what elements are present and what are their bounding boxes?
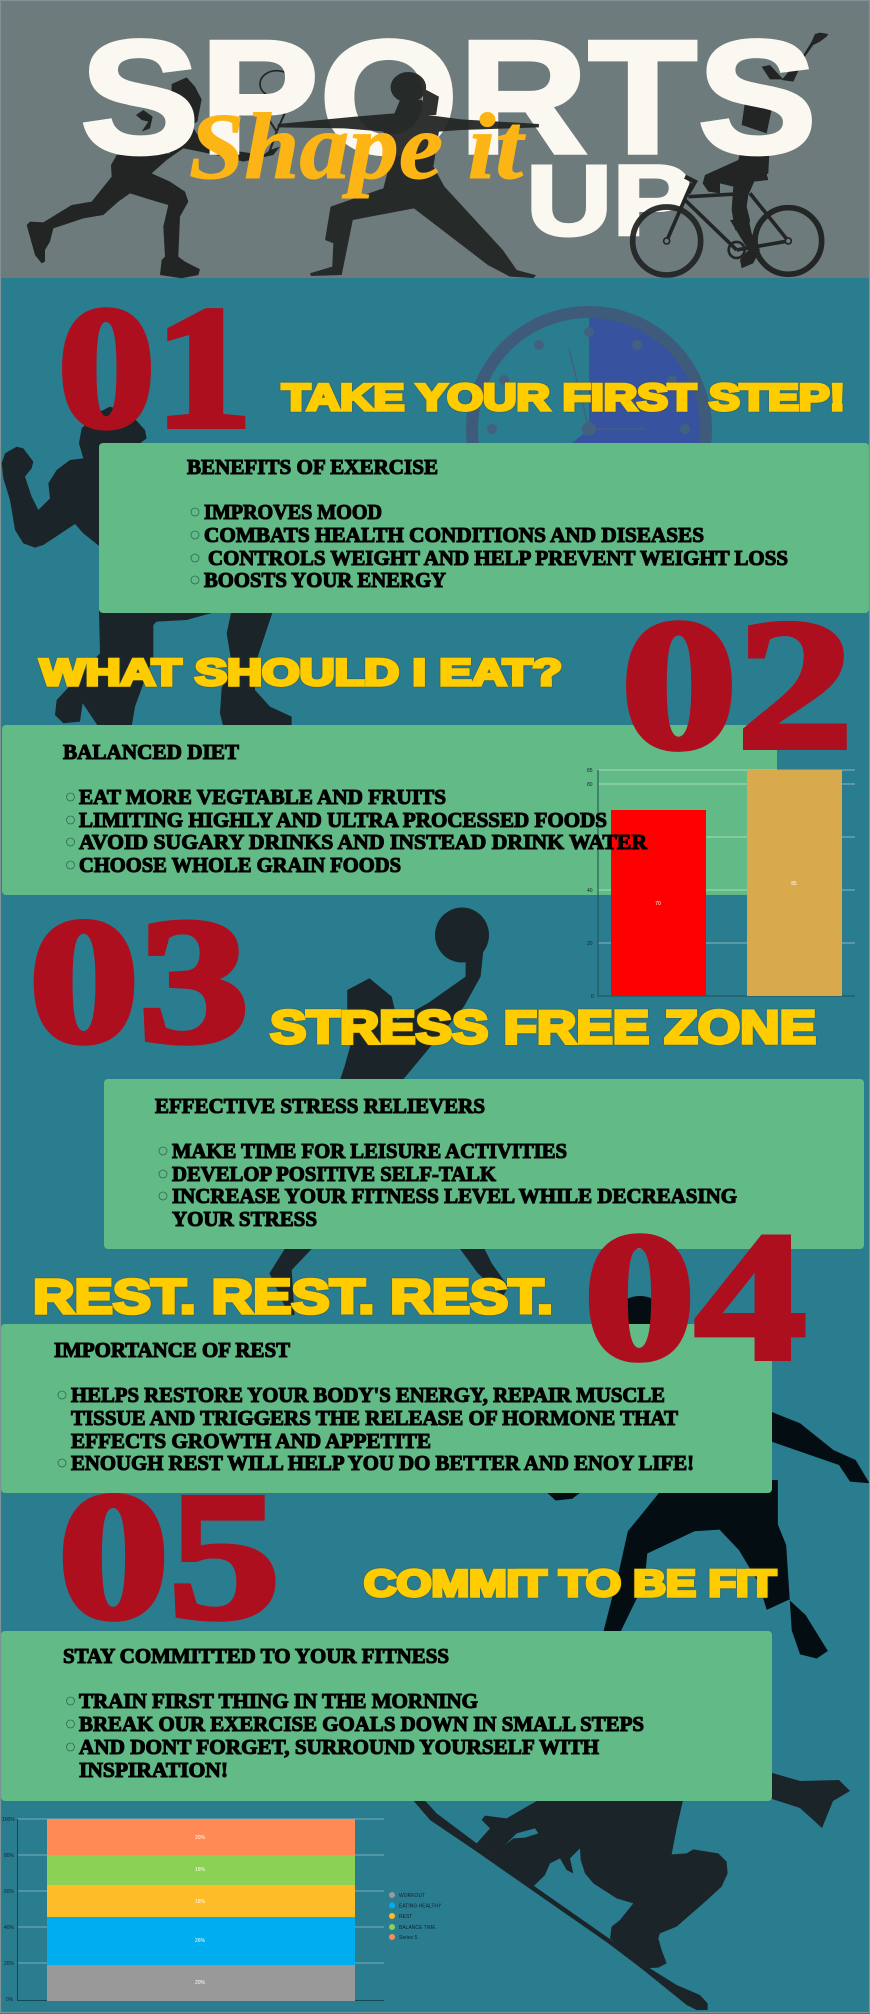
section 1 — [58, 271, 869, 613]
bullet list: AND DONT FORGET, SURROUND YOURSELF WITH — [79, 1735, 599, 1759]
bar chart: 85 — [587, 768, 593, 774]
axis labels: 20% — [4, 1961, 15, 1967]
legend — [389, 1892, 442, 1941]
snowboard and rider — [413, 1799, 728, 2010]
title: SPORTS: SPORTS — [80, 7, 817, 188]
stacked bar chart: 20% — [195, 1835, 206, 1841]
bullet list: YOUR STRESS — [172, 1207, 317, 1231]
bullet list: IMPROVES MOOD — [204, 500, 382, 524]
silhouette: cyclist rider — [703, 33, 828, 268]
heading: EFFECTIVE STRESS RELIEVERS — [155, 1094, 485, 1118]
silhouette: jumping athlete — [544, 1296, 870, 1658]
bullet list: TRAIN FIRST THING IN THE MORNING — [79, 1689, 478, 1713]
bullet list: INCREASE YOUR FITNESS LEVEL WHILE DECREASING — [172, 1184, 737, 1208]
bar chart: 70 — [655, 901, 661, 907]
panel: benefits of exercise — [99, 443, 869, 613]
section 5 — [1, 1456, 776, 1801]
legend: WORKOUT — [399, 1893, 425, 1899]
basketball — [435, 908, 489, 962]
heading: IMPORTANCE OF REST — [54, 1338, 290, 1362]
heading: STAY COMMITTED TO YOUR FITNESS — [63, 1644, 449, 1668]
bullet list — [58, 1383, 694, 1475]
number 01: 01 — [58, 271, 252, 464]
bullet list: BREAK OUR EXERCISE GOALS DOWN IN SMALL STEPS — [79, 1712, 644, 1736]
icon: clock — [472, 312, 706, 546]
stacked bar chart: 16% — [195, 1867, 206, 1873]
axis labels — [2, 1817, 15, 2003]
bullet list: AVOID SUGARY DRINKS AND INSTEAD DRINK WATER — [79, 830, 648, 854]
heading: BALANCED DIET — [63, 740, 239, 764]
bicycle — [633, 177, 822, 275]
bar chart: 85 — [791, 881, 797, 887]
bullet list: EAT MORE VEGTABLE AND FRUITS — [79, 785, 446, 809]
bullet list: HELPS RESTORE YOUR BODY'S ENERGY, REPAIR MUSCLE — [71, 1383, 665, 1407]
number 05: 05 — [58, 1456, 280, 1657]
bullet list: COMBATS HEALTH CONDITIONS AND DISEASES — [204, 523, 704, 547]
axis labels: 0% — [6, 1997, 14, 2003]
bullet list: DEVELOP POSITIVE SELF-TALK — [172, 1162, 497, 1186]
bar chart — [587, 768, 855, 1000]
legend: EATING HEALTHY — [399, 1904, 442, 1910]
panel: balanced diet — [2, 725, 855, 1000]
bullet list: ENOUGH REST WILL HELP YOU DO BETTER AND ENOY LIFE! — [71, 1451, 694, 1475]
header banner — [0, 0, 870, 278]
number 04: 04 — [584, 1195, 806, 1398]
section 3 — [29, 881, 864, 1249]
header background — [0, 0, 870, 278]
bullet list: BOOSTS YOUR ENERGY — [204, 568, 446, 592]
title: Shape it: Shape it — [189, 95, 526, 199]
stacked bar chart — [2, 1817, 442, 2003]
axis labels: 100% — [2, 1817, 15, 1823]
rider hand — [769, 1772, 850, 1828]
bullet list — [66, 1689, 644, 1782]
bullet list — [191, 500, 788, 592]
silhouette: runner with racket — [27, 71, 293, 278]
bullet list: CONTROLS WEIGHT AND HELP PREVENT WEIGHT LOSS — [208, 546, 788, 570]
bullet list: LIMITING HIGHLY AND ULTRA PROCESSED FOODS — [79, 808, 607, 832]
legend: BALANCE TIME — [399, 1925, 436, 1931]
title: rest rest rest: REST. REST. REST. — [33, 1271, 553, 1324]
number 03: 03 — [29, 881, 249, 1080]
bullet list: MAKE TIME FOR LEISURE ACTIVITIES — [172, 1139, 567, 1163]
heading: BENEFITS OF EXERCISE — [187, 455, 438, 479]
title: UP: UP — [526, 145, 692, 257]
title: stress free zone: STRESS FREE ZONE — [270, 1001, 816, 1053]
panel: importance of rest — [1, 1324, 772, 1493]
silhouette: yoga woman — [278, 72, 539, 278]
panel: stay committed — [1, 1631, 772, 1801]
bar chart: 20 — [587, 941, 593, 947]
bullet list: CHOOSE WHOLE GRAIN FOODS — [79, 853, 401, 877]
bullet list: EFFECTS GROWTH AND APPETITE — [71, 1429, 431, 1453]
number 02: 02 — [621, 582, 853, 788]
section 4 — [1, 1195, 806, 1493]
bar chart: 80 — [587, 782, 593, 788]
legend: Series 5 — [399, 1935, 418, 1941]
silhouette: snowboarder — [413, 1772, 850, 2010]
bullet list: INSPIRATION! — [79, 1758, 228, 1782]
title: take your first step: TAKE YOUR FIRST STEP! — [282, 377, 845, 418]
bar chart: 0 — [591, 994, 594, 1000]
panel: effective stress relievers — [104, 1079, 864, 1249]
bullet list — [159, 1139, 737, 1231]
title: commit to be fit: COMMIT TO BE FIT — [364, 1563, 776, 1604]
silhouette: flexing athlete — [2, 407, 292, 727]
silhouette: basketball player — [269, 908, 508, 1315]
legend: REST — [399, 1914, 412, 1920]
stacked bar chart: 18% — [195, 1899, 206, 1905]
axis labels: 60% — [4, 1889, 15, 1895]
title: what should I eat: WHAT SHOULD I EAT? — [40, 652, 562, 693]
bullet list — [66, 785, 648, 877]
bar chart: 40 — [587, 888, 593, 894]
section 2 — [2, 582, 855, 1000]
axis labels: 40% — [4, 1925, 15, 1931]
stacked bar chart: 20% — [195, 1980, 206, 1986]
bullet list: TISSUE AND TRIGGERS THE RELEASE OF HORMONE THAT — [71, 1406, 678, 1430]
axis labels: 80% — [4, 1853, 15, 1859]
stacked bar chart: 26% — [195, 1938, 206, 1944]
